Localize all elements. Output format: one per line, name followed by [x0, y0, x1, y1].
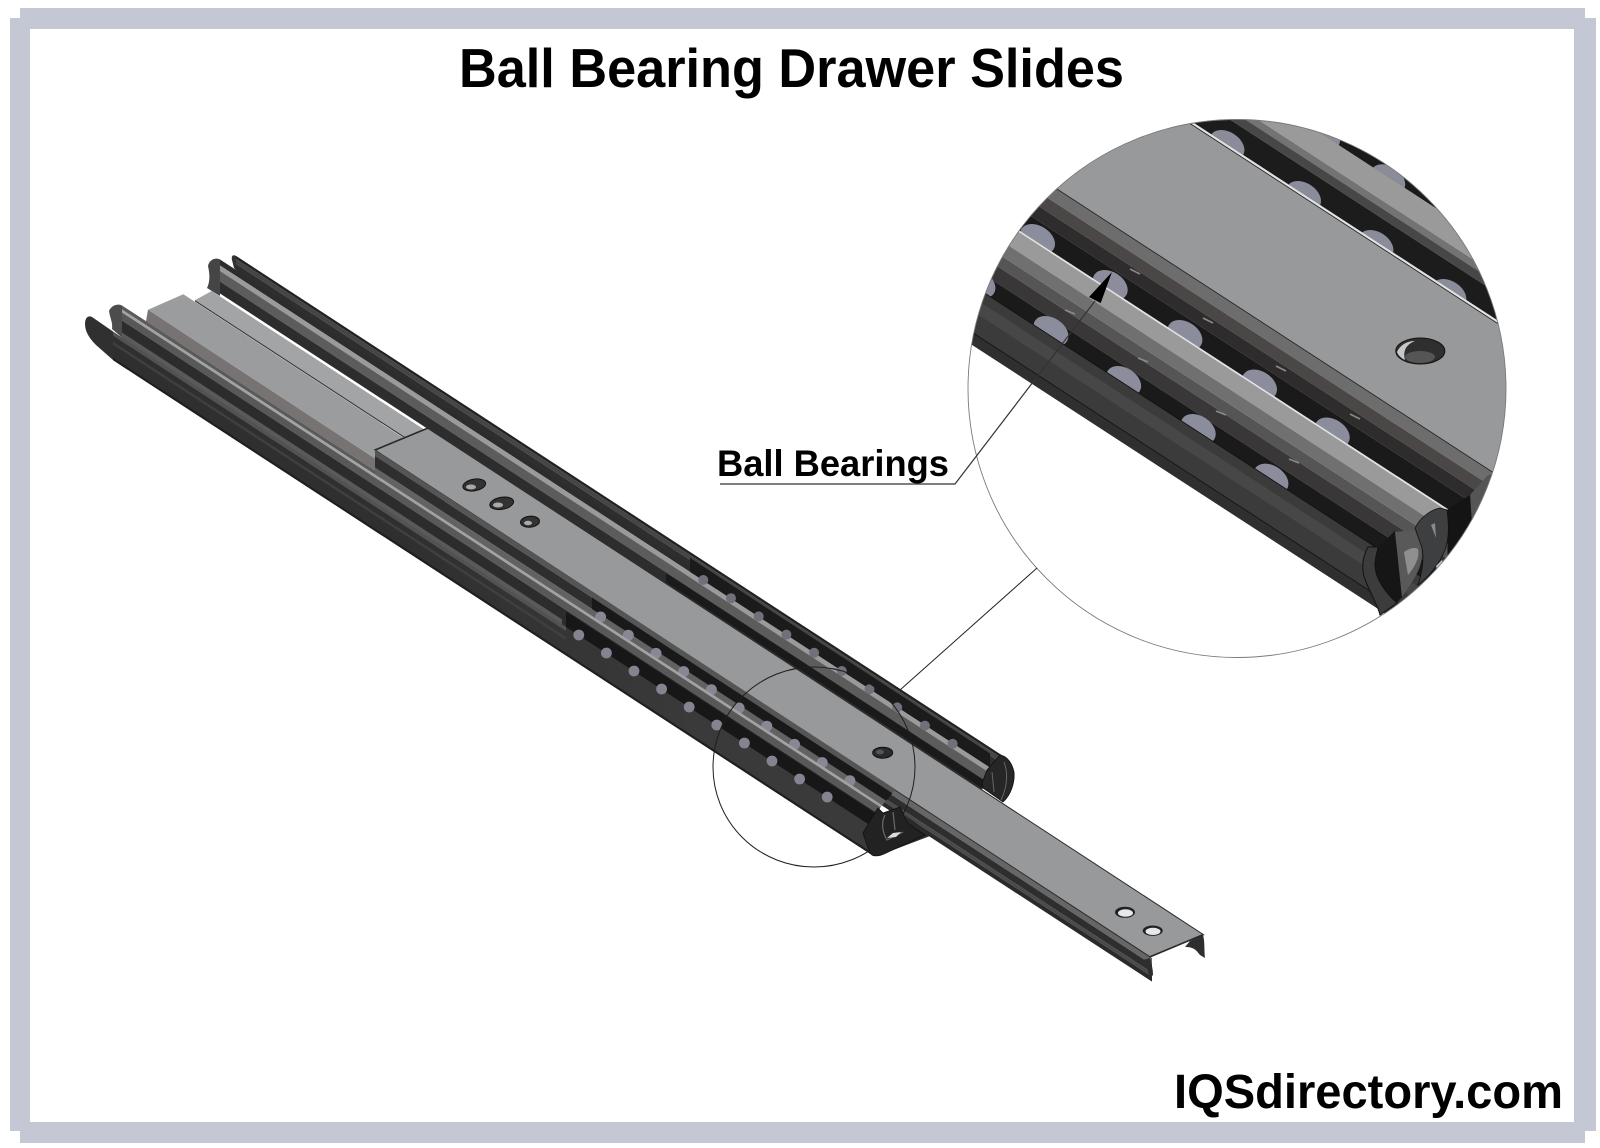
ball row B: [573, 630, 833, 802]
magnified bands above the plate: [1194, 120, 1497, 320]
magnified detail circle: [968, 119, 1506, 658]
callout: ball bearings: Ball Bearings: [717, 443, 949, 484]
magnified circle outline: [968, 120, 1506, 658]
extension rail tip flanges: [1143, 935, 1205, 978]
magnified rail end profile: [1362, 474, 1492, 616]
inner rail bands with ball channels: [122, 260, 992, 824]
mounting holes: front plate: [462, 477, 893, 758]
upper outer lip: [236, 256, 1006, 778]
magnified balls: middle and lower rows: [986, 224, 1350, 489]
connector line between circles: [900, 568, 1037, 690]
rear rail tips: [85, 255, 236, 360]
rear inner plates: [146, 248, 445, 516]
drawer slide assembly: [85, 196, 1205, 1015]
magnified plate hole: [1396, 338, 1445, 364]
magnified strips and plate: [990, 120, 1506, 580]
title: Ball Bearing Drawer Slides: [459, 37, 1124, 99]
lower outer band: [113, 332, 873, 856]
magnified lower bands: [972, 230, 1448, 613]
small detail circle: [713, 667, 915, 867]
site credit: IQSdirectory.com: [1174, 1066, 1563, 1119]
front bridge of the fixed rail: [868, 812, 930, 855]
callout: ball bearings: [717, 272, 1112, 484]
magnified bearing slots: [1065, 269, 1360, 463]
extension plate: [375, 394, 1203, 1015]
rail front end: upper: [982, 755, 1014, 802]
ball row C: [698, 575, 958, 749]
mounting holes: extension tip: [1115, 907, 1163, 936]
magnified balls: top rows: [1212, 130, 1466, 300]
rail front end: lower: [863, 807, 925, 856]
ball row A: [595, 612, 855, 786]
